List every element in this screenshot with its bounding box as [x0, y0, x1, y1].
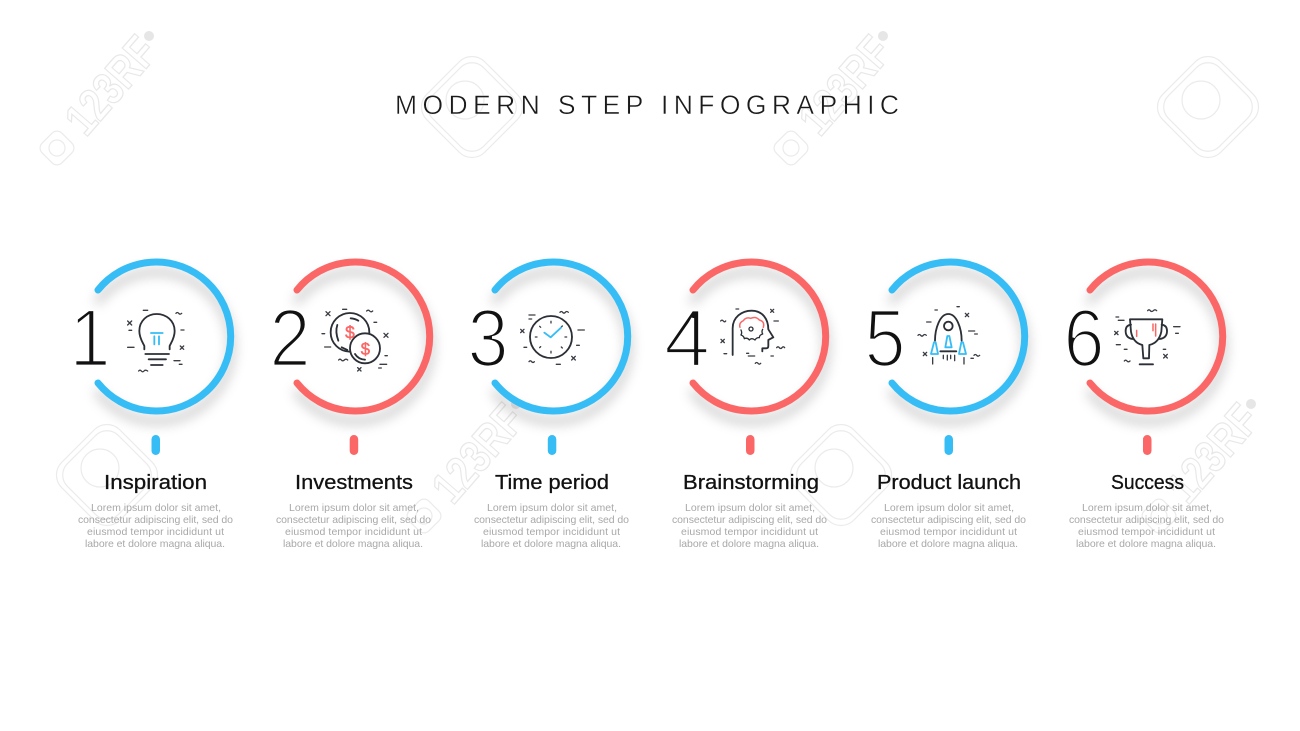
watermark big camera 1 [414, 49, 530, 165]
watermark big camera 4 [783, 417, 899, 533]
ring shadow 1 [98, 272, 231, 421]
body text 2: eiusmod tempor incididunt ut [285, 526, 422, 538]
ring shadow 3 [495, 272, 628, 421]
heading 4: Brainstorming [683, 471, 819, 494]
body text 4 [672, 502, 827, 550]
heading 6: Success [1111, 471, 1184, 494]
body text 4: labore et dolore magna aliqua. [679, 538, 819, 550]
icon: coins: $ [345, 323, 355, 343]
body text 5: Lorem ipsum dolor sit amet, [884, 502, 1014, 514]
watermark logo bottom right [1139, 394, 1269, 536]
number 1: 1 [70, 293, 110, 384]
step 1: Inspiration [70, 262, 233, 550]
icon: clock [521, 311, 584, 364]
pill 3 [548, 435, 556, 455]
body text 4: consectetur adipiscing elit, sed do [672, 514, 827, 526]
body text 6: consectetur adipiscing elit, sed do [1069, 514, 1224, 526]
ring 4 [693, 262, 826, 411]
step 2: Investments [270, 262, 431, 550]
body text 1: Lorem ipsum dolor sit amet, [91, 502, 221, 514]
pill 5 [944, 435, 953, 455]
heading 2: Investments [295, 471, 413, 494]
step 3: Time period [468, 262, 629, 550]
body text 2: labore et dolore magna aliqua. [283, 538, 423, 550]
body text 6: Lorem ipsum dolor sit amet, [1082, 502, 1212, 514]
icon: coins [322, 309, 388, 371]
ring 3 [495, 262, 628, 411]
ring 2 [297, 262, 430, 411]
body text 2: Lorem ipsum dolor sit amet, [289, 502, 419, 514]
pill 6 [1143, 435, 1152, 455]
body text 3: labore et dolore magna aliqua. [481, 538, 621, 550]
icon: light bulb [128, 310, 184, 372]
body text 1: labore et dolore magna aliqua. [85, 538, 225, 550]
ring shadow 4 [693, 272, 826, 421]
body text 2: consectetur adipiscing elit, sed do [276, 514, 431, 526]
icon: rocket [918, 307, 980, 364]
body text 1: eiusmod tempor incididunt ut [87, 526, 224, 538]
body text 4: eiusmod tempor incididunt ut [681, 526, 818, 538]
pill 2 [350, 435, 358, 455]
body text 6: eiusmod tempor incididunt ut [1078, 526, 1215, 538]
icon: head with gear [721, 309, 785, 364]
watermark logo top left: 123RF [54, 26, 167, 145]
title: MODERN STEP INFOGRAPHIC [395, 90, 899, 120]
number 2: 2 [270, 293, 310, 384]
watermark logo bottom right: 123RF [1156, 394, 1269, 513]
number 3: 3 [468, 293, 508, 384]
body text 3: consectetur adipiscing elit, sed do [474, 514, 629, 526]
ring shadow 5 [892, 272, 1025, 421]
step 5: Product launch [864, 262, 1026, 550]
watermark logo bottom centre-left: 123RF [421, 394, 534, 513]
body text 3: Lorem ipsum dolor sit amet, [487, 502, 617, 514]
ring 5 [892, 262, 1025, 411]
watermark logo top left [37, 26, 167, 168]
heading 5: Product launch [877, 471, 1021, 494]
body text 5: eiusmod tempor incididunt ut [880, 526, 1017, 538]
watermark logo top centre: 123RF [788, 26, 901, 145]
ring shadow 6 [1090, 272, 1223, 421]
body text 1: consectetur adipiscing elit, sed do [78, 514, 233, 526]
icon: trophy [1115, 310, 1180, 364]
watermark big camera 2 [1150, 49, 1266, 165]
body text 3: eiusmod tempor incididunt ut [483, 526, 620, 538]
body text 6 [1069, 502, 1224, 550]
number 6: 6 [1064, 293, 1104, 384]
body text 4: Lorem ipsum dolor sit amet, [685, 502, 815, 514]
body text 2 [276, 502, 431, 550]
ring 6 [1090, 262, 1223, 411]
body text 1 [78, 502, 233, 550]
watermark big camera 3 [49, 417, 165, 533]
body text 5 [871, 502, 1026, 550]
watermark logo top centre [771, 26, 901, 168]
heading 1: Inspiration [104, 471, 207, 494]
number 4: 4 [664, 293, 710, 384]
ring shadow 2 [297, 272, 430, 421]
watermark logo bottom centre-left [404, 394, 534, 536]
body text 3 [474, 502, 629, 550]
number 5: 5 [864, 293, 906, 384]
body text 6: labore et dolore magna aliqua. [1076, 538, 1216, 550]
body text 5: consectetur adipiscing elit, sed do [871, 514, 1026, 526]
step 6: Success [1064, 262, 1224, 550]
step 4: Brainstorming [664, 262, 827, 550]
pill 1 [152, 435, 160, 455]
icon: coins: $ [361, 339, 370, 358]
ring 1 [98, 262, 231, 411]
pill 4 [746, 435, 754, 455]
watermarks [37, 26, 1269, 536]
heading 3: Time period [495, 471, 609, 494]
body text 5: labore et dolore magna aliqua. [878, 538, 1018, 550]
